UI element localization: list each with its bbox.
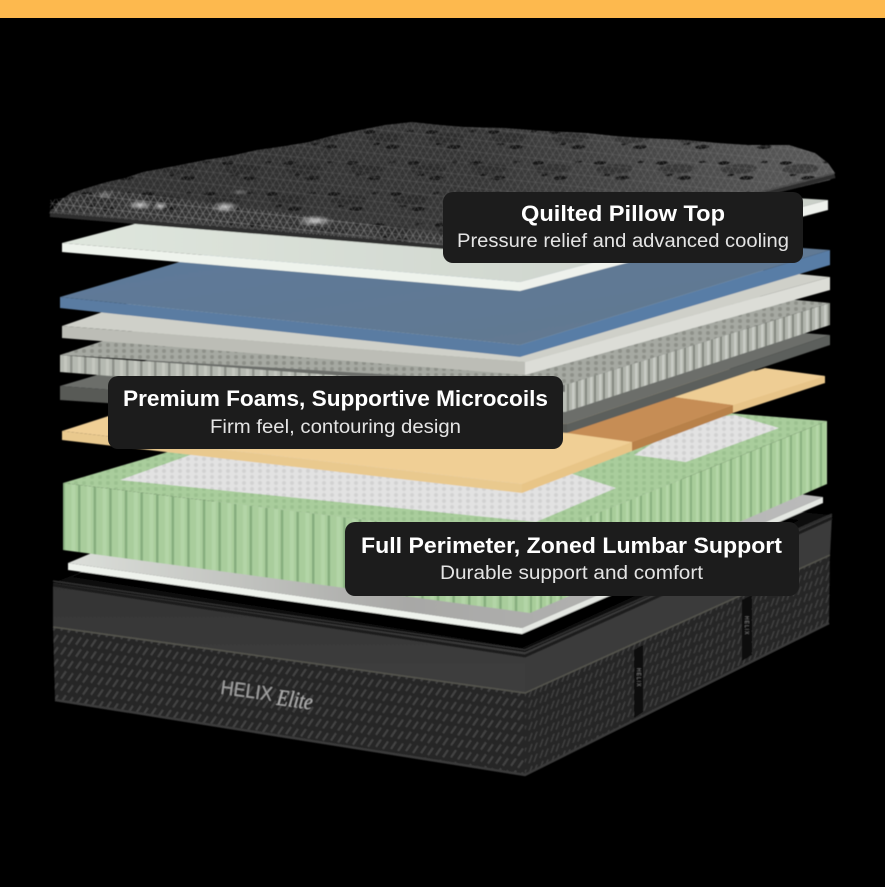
callout: Premium Foams, Supportive Microcoils: Firm feel, contouring design [210, 417, 461, 438]
white marble cooling layer [62, 170, 828, 291]
callout: Premium Foams, Supportive Microcoils [108, 376, 563, 449]
quilted pillow top [49, 122, 835, 254]
base layer: encasement with Helix Elite branding [53, 470, 832, 775]
callout: Premium Foams, Supportive Microcoils: Premium Foams, Supportive Microcoils [123, 386, 548, 411]
callout: Quilted Pillow Top: Quilted Pillow Top [521, 201, 725, 226]
brand logo: HELIX [219, 677, 274, 706]
callout: Quilted Pillow Top [443, 192, 803, 263]
white coil zone front [120, 430, 616, 522]
green zoned coil layer [63, 386, 827, 613]
brand logo [219, 677, 314, 715]
callout: Full Perimeter, Zoned Lumbar Support [345, 522, 799, 596]
callout: Full Perimeter, Zoned Lumbar Support: Full Perimeter, Zoned Lumbar Support [361, 533, 783, 558]
grey microcoil layer [60, 260, 830, 412]
callout: Full Perimeter, Zoned Lumbar Support: Durable support and comfort [440, 563, 704, 584]
side handle straps: HELIX [743, 616, 749, 635]
brand logo: Elite [275, 685, 314, 715]
highlights [96, 189, 333, 227]
side handle straps [634, 595, 752, 718]
side handle straps: HELIX [635, 668, 641, 687]
callout: Quilted Pillow Top: Pressure relief and advanced cooling [457, 231, 789, 252]
top accent bar [0, 0, 885, 18]
light grey foam layer [62, 230, 830, 375]
bottom white foam sheet [68, 440, 823, 634]
mattress exploded layers [49, 122, 835, 775]
blue gel foam layer [60, 215, 830, 357]
dark grey foam layer [60, 300, 830, 433]
white coil zone back [634, 415, 779, 462]
tan comfort foam with orange lumbar zone [62, 340, 825, 493]
